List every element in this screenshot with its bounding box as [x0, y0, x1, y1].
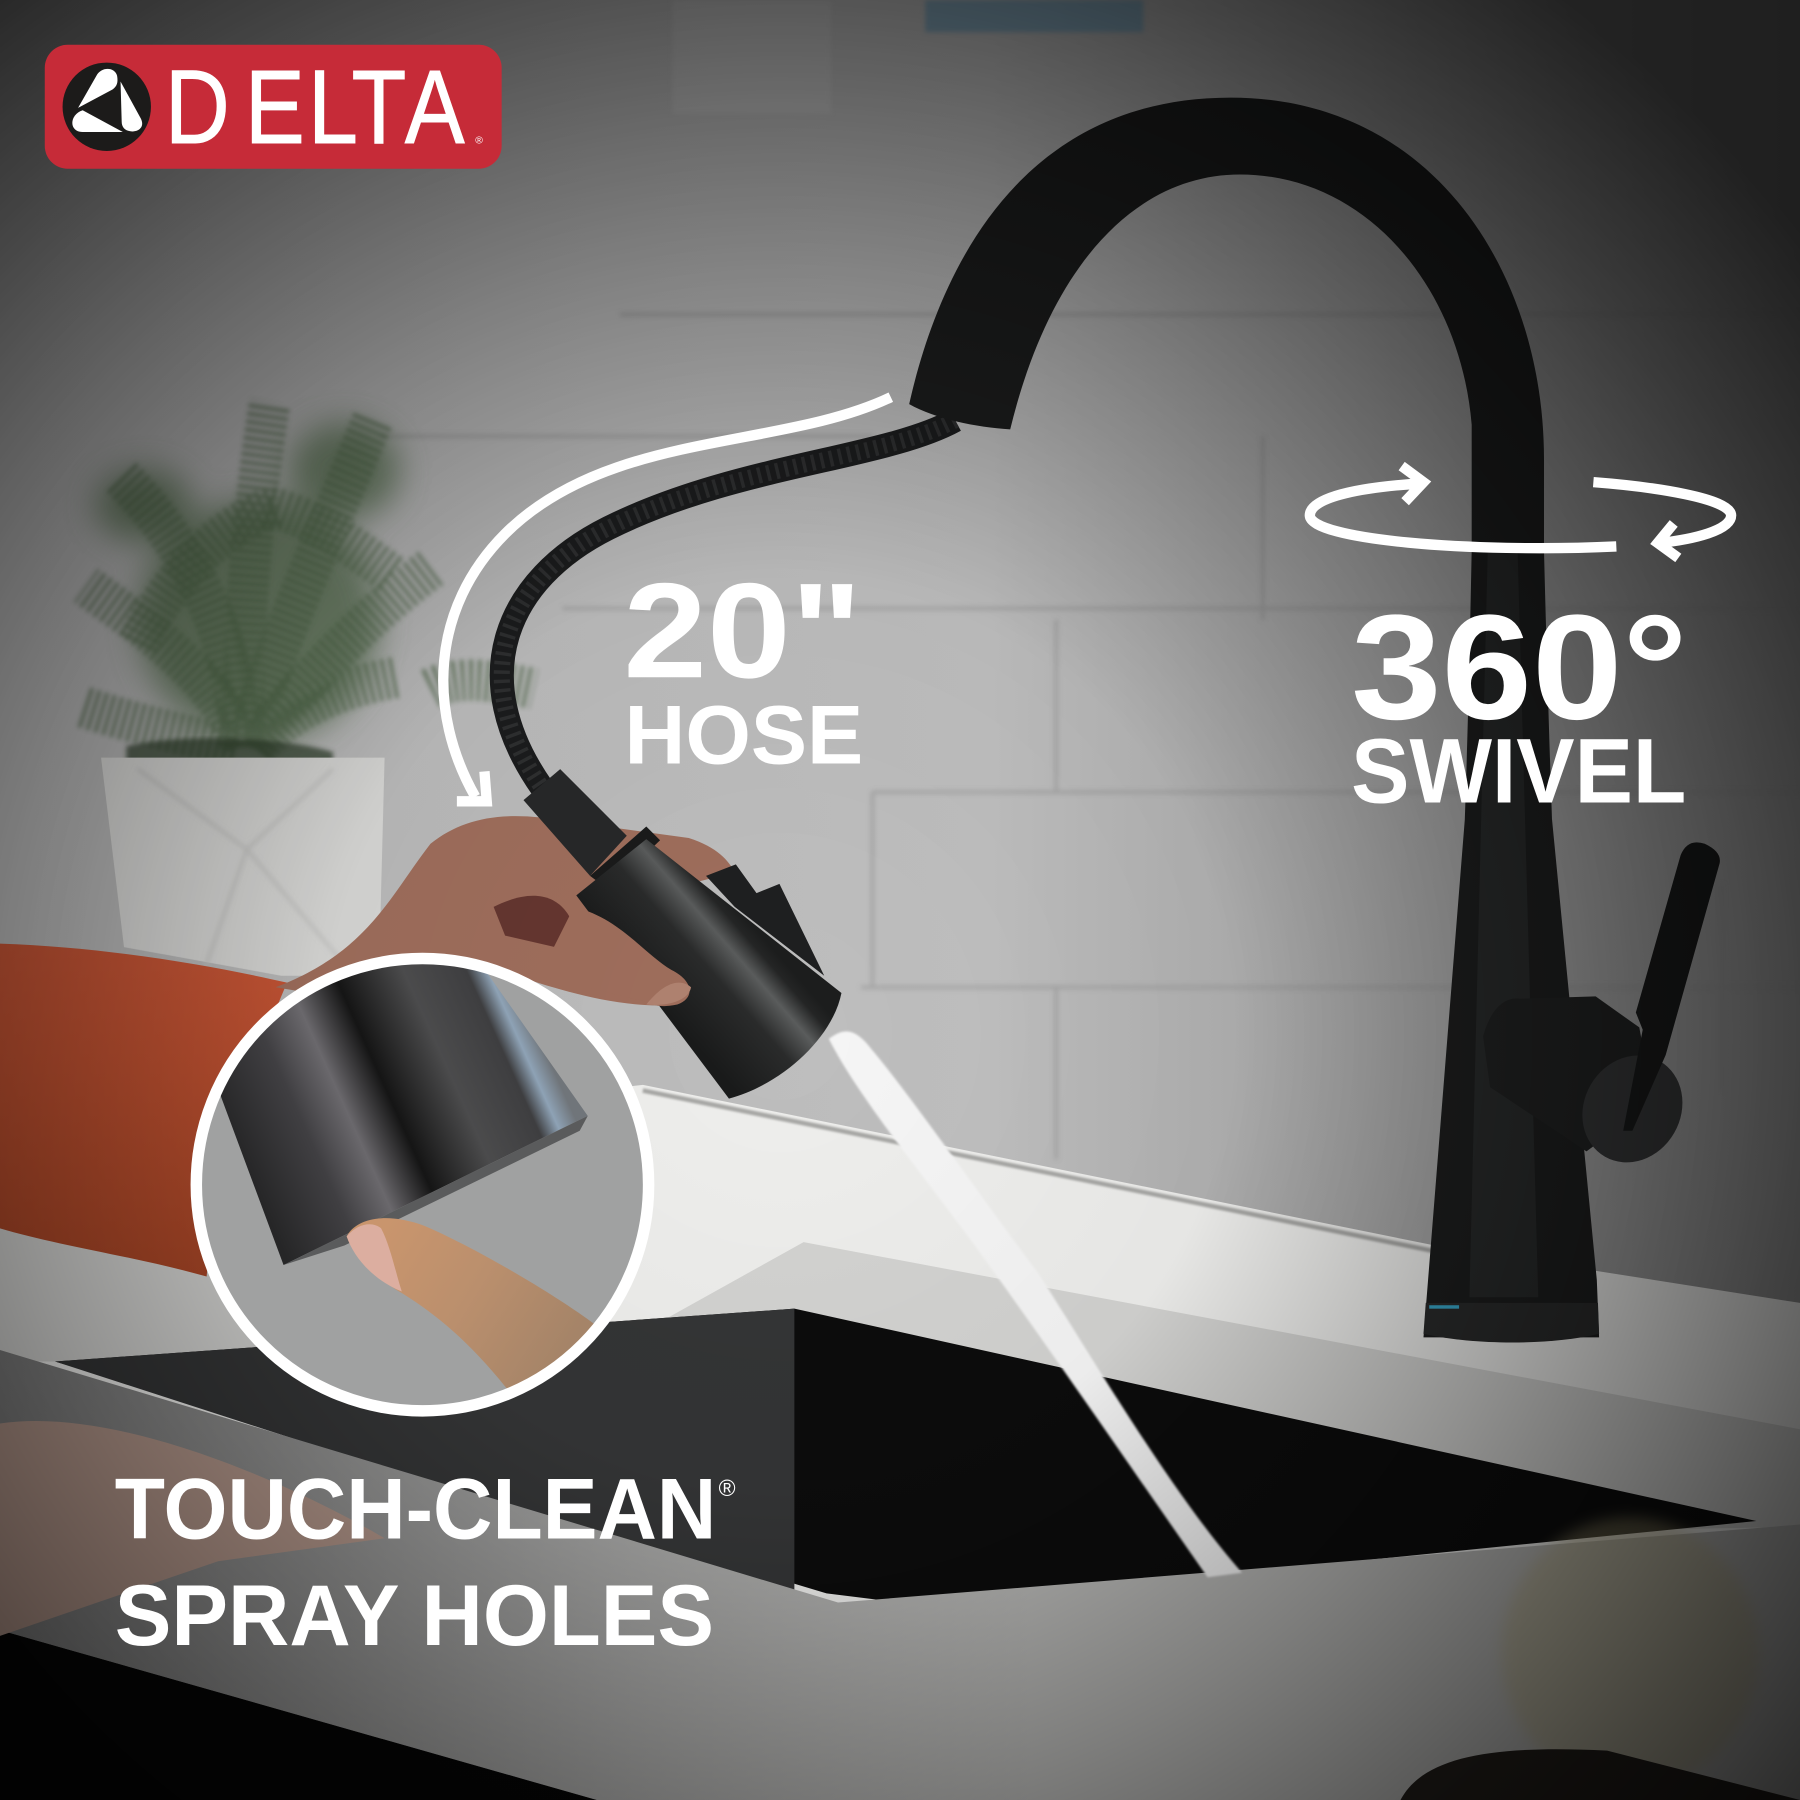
- label: touch-clean spray holes: ®: [719, 1475, 736, 1501]
- inset circle: touch-clean spray holes: [172, 918, 649, 1411]
- logo: Delta: [45, 45, 502, 169]
- label: 20 inch hose: 20": [623, 554, 862, 706]
- potted plant: [80, 402, 534, 976]
- hose: [502, 420, 955, 788]
- arrows: swivel rotation: [1310, 466, 1731, 558]
- label: 360 degree swivel: 360°: [1351, 584, 1688, 751]
- label: touch-clean spray holes: SPRAY HOLES: [115, 1568, 714, 1664]
- label: touch-clean spray holes: TOUCH-CLEAN: [115, 1461, 716, 1557]
- icon: sprayer close-up: [220, 964, 588, 1265]
- front counter: [0, 1350, 1800, 1800]
- hand holding sprayer: [276, 816, 735, 1005]
- arm sleeve: [0, 944, 287, 1277]
- arrow: hose reach: [443, 397, 891, 801]
- faucet: [909, 98, 1720, 1343]
- sink basin: [55, 1309, 1756, 1605]
- icon: fingertip: [347, 1218, 597, 1395]
- faucet neck and body: [909, 98, 1599, 1337]
- icon: delta emblem: [63, 63, 151, 151]
- water stream: [829, 1031, 1242, 1577]
- label: 20 inch hose: [623, 554, 863, 781]
- sprayer head: [523, 769, 841, 1099]
- wordmark: DELTA: [165, 49, 465, 165]
- label: 360 degree swivel: [1351, 584, 1688, 822]
- countertop: [0, 1085, 1800, 1800]
- label: touch-clean spray holes: [115, 1461, 736, 1664]
- registered mark: ®: [475, 135, 483, 146]
- faucet handle: [1483, 996, 1653, 1151]
- label: 20 inch hose: HOSE: [624, 687, 863, 781]
- label: 360 degree swivel: SWIVEL: [1351, 720, 1686, 822]
